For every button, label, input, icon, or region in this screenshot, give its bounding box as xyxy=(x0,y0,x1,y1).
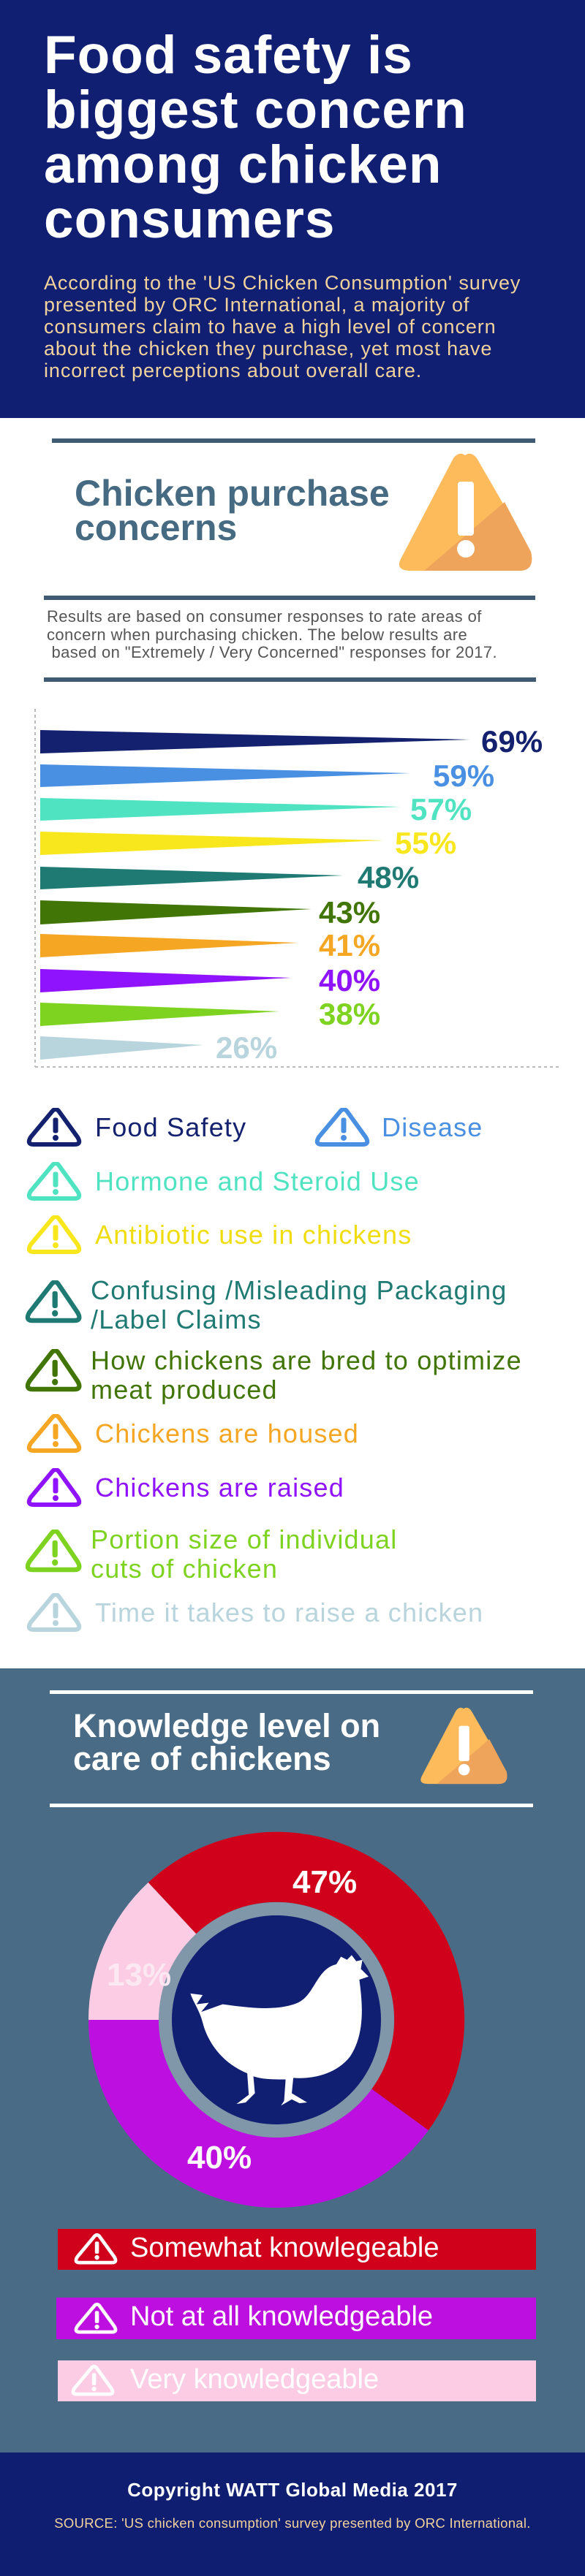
legend: knowledge xyxy=(56,2229,536,2401)
bar chart: concerns xyxy=(34,709,559,1068)
legend item: portion: Portion size of individual xyxy=(91,1524,397,1554)
heading: knowledge level xyxy=(73,1707,380,1777)
legend item: bred xyxy=(25,1345,522,1405)
legend item: somewhat: Somewhat knowlegeable xyxy=(130,2233,439,2263)
icon: warning triangle small xyxy=(420,1707,507,1785)
heading: chicken purchase concerns xyxy=(75,473,390,548)
legend item: housed xyxy=(26,1414,359,1453)
legend item: hormone: Hormone and Steroid Use xyxy=(95,1166,420,1196)
title: biggest concern xyxy=(44,80,467,140)
legend item: antibiotic xyxy=(26,1215,412,1254)
intro paragraph: consumers claim to have a high level of concern xyxy=(44,316,497,338)
bar chart: concerns: 69% xyxy=(481,724,543,759)
bar chart: concerns: 26% xyxy=(216,1030,277,1065)
legend item: not at all xyxy=(56,2298,536,2339)
title xyxy=(44,26,467,249)
legend item: portion: cuts of chicken xyxy=(91,1554,278,1584)
bar chart: concerns: 59% xyxy=(433,759,494,793)
donut chart: knowledge: 13% xyxy=(107,1957,171,1993)
donut chart: knowledge xyxy=(88,1831,465,2208)
title: among chicken xyxy=(44,135,442,194)
intro paragraph: presented by ORC International, a majority of xyxy=(44,294,469,316)
legend item: food safety: Food Safety xyxy=(95,1112,246,1142)
legend item: time: Time it takes to raise a chicken xyxy=(95,1597,483,1627)
legend item: bred: meat produced xyxy=(91,1375,278,1405)
copyright: Copyright WATT Global Media 2017 xyxy=(127,2479,458,2501)
bar chart: concerns: 41% xyxy=(319,928,380,962)
legend item: somewhat xyxy=(58,2229,536,2270)
legend item: disease xyxy=(314,1108,483,1147)
title: consumers xyxy=(44,190,335,249)
legend item: food safety xyxy=(26,1108,246,1147)
heading: chicken purchase concerns: Chicken purchase xyxy=(75,473,390,514)
heading: knowledge level: Knowledge level on xyxy=(73,1707,380,1744)
legend item: portion xyxy=(25,1524,397,1584)
legend item: raised: Chickens are raised xyxy=(95,1473,344,1502)
header panel xyxy=(0,0,585,418)
legend item: bred: How chickens are bred to optimize xyxy=(91,1345,522,1375)
intro paragraph: According to the 'US Chicken Consumption' survey xyxy=(44,272,521,294)
bar chart: concerns: 57% xyxy=(410,792,472,827)
legend item: antibiotic: Antibiotic use in chickens xyxy=(95,1220,412,1250)
source: SOURCE: 'US chicken consumption' survey presented by ORC International. xyxy=(54,2515,531,2531)
icon: warning triangle xyxy=(399,453,532,571)
bar chart: concerns: 38% xyxy=(319,997,380,1031)
legend item: housed: Chickens are housed xyxy=(95,1418,359,1448)
legend: concerns xyxy=(25,1108,522,1632)
intro paragraph xyxy=(44,272,521,381)
intro paragraph: about the chicken they purchase, yet most have xyxy=(44,338,492,360)
panel: knowledge level xyxy=(0,1668,585,2453)
heading: knowledge level: care of chickens xyxy=(73,1740,331,1777)
title: Food safety is xyxy=(44,26,413,85)
legend item: packaging: Confusing /Misleading Packaging xyxy=(91,1275,507,1305)
note text: based on "Extremely / Very Concerned" responses for 2017. xyxy=(51,643,497,661)
bar chart: concerns: 48% xyxy=(358,860,419,894)
intro paragraph: incorrect perceptions about overall care. xyxy=(44,360,422,381)
legend item: packaging: /Label Claims xyxy=(91,1304,262,1334)
donut chart: knowledge: 40% xyxy=(187,2140,252,2176)
bar chart: concerns: 43% xyxy=(319,895,380,930)
legend item: very xyxy=(58,2360,536,2401)
donut chart: knowledge: 47% xyxy=(292,1864,357,1900)
bar chart: concerns: 40% xyxy=(319,963,380,998)
bar chart: concerns: 55% xyxy=(395,826,456,860)
legend item: packaging xyxy=(25,1275,507,1334)
legend item: disease: Disease xyxy=(382,1112,483,1142)
note text: Results are based on consumer responses to rate areas of xyxy=(47,607,482,626)
legend item: very: Very knowledgeable xyxy=(130,2364,379,2395)
legend item: hormone xyxy=(26,1162,420,1201)
legend item: not at all: Not at all knowledgeable xyxy=(130,2301,433,2332)
legend item: raised xyxy=(26,1468,344,1507)
footer xyxy=(0,2452,585,2576)
heading: chicken purchase concerns: concerns xyxy=(75,507,237,548)
icon: hen silhouette xyxy=(190,1955,369,2105)
note text xyxy=(47,607,497,661)
note text: concern when purchasing chicken. The below results are xyxy=(47,626,467,643)
legend item: time xyxy=(26,1593,483,1632)
